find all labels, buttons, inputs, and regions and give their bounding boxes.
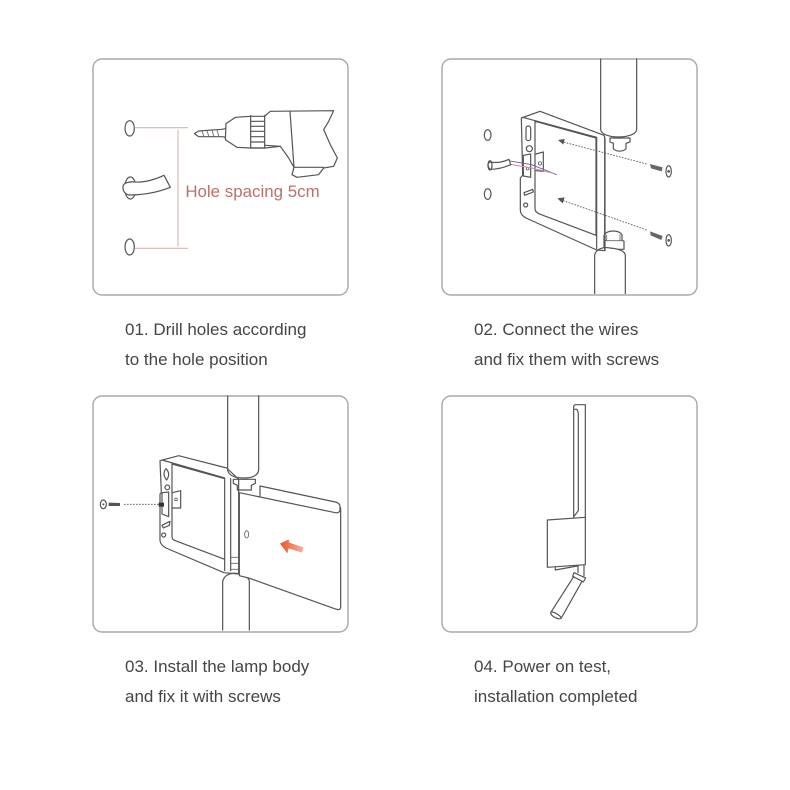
icon: lower pole — [595, 231, 625, 294]
panel: step 1 drill holes — [93, 59, 348, 295]
icon: orange push arrow — [280, 539, 303, 553]
icon: mounting bracket — [520, 111, 605, 251]
icon: lower screw — [650, 231, 671, 246]
icon: lamp body — [239, 486, 341, 610]
caption: step 1: 01. Drill holes according — [125, 320, 306, 339]
label: hole spacing: Hole spacing 5cm — [185, 182, 320, 201]
icon: upper hole — [125, 121, 134, 136]
caption: step 2: 02. Connect the wires — [474, 320, 638, 339]
icon: mounting bracket — [160, 456, 239, 574]
spacing bracket — [135, 128, 188, 248]
icon: wire in middle hole — [123, 175, 170, 199]
caption: step 4: 04. Power on test, — [474, 657, 611, 676]
icon: wires — [488, 159, 557, 175]
icon: lower pole — [223, 573, 249, 630]
arrow: screw path — [124, 503, 164, 507]
icon: upper pole — [601, 59, 637, 137]
caption: step 4: installation completed — [474, 687, 637, 706]
icon: wall holes — [484, 130, 491, 199]
caption: step 2: and fix them with screws — [474, 350, 659, 369]
icon: lower hole — [125, 239, 134, 255]
icon: upper pole — [228, 396, 259, 478]
caption: step 1: to the hole position — [125, 350, 268, 369]
icon: drill — [194, 111, 337, 177]
panel: step 4 power on test — [442, 396, 697, 632]
caption: step 3: and fix it with screws — [125, 687, 281, 706]
arrow: lower screw path — [557, 197, 647, 230]
panel: step 2 connect wires — [442, 59, 697, 295]
icon: finished wall lamp side view — [547, 405, 586, 619]
caption: step 3: 03. Install the lamp body — [125, 657, 309, 676]
icon: upper screw — [650, 164, 671, 177]
icon: screw — [100, 500, 120, 509]
panel: step 3 install lamp body — [93, 396, 348, 632]
arrow: upper screw path — [558, 139, 647, 164]
